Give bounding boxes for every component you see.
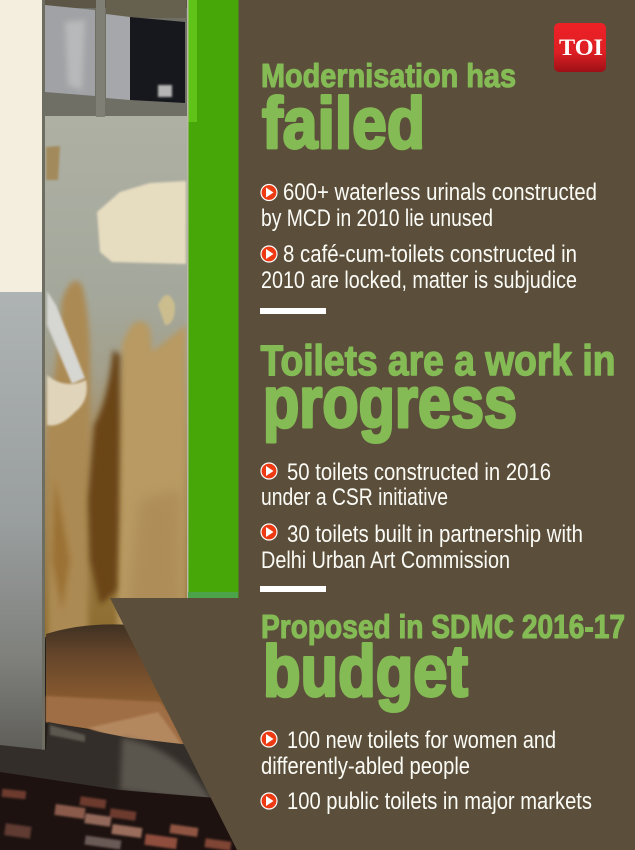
bullet: cafe-cum-toilets [261, 241, 577, 294]
bullet: art commission toilets: Delhi Urban Art Commission [261, 547, 510, 574]
heading: modernisation has failed: failed [262, 84, 425, 164]
logo: TOI [554, 23, 606, 72]
photo: dirty urinal in a public toilet [0, 0, 240, 850]
floor and step [0, 624, 240, 850]
section: modernisation has failed [261, 57, 597, 294]
section: proposed in budget [261, 608, 625, 815]
section: toilets are a work in progress [260, 337, 616, 574]
heading: proposed in SDMC budget [261, 608, 625, 712]
bullet: art commission toilets: 30 toilets built in partnership with [287, 521, 583, 548]
bullet: waterless urinals: by MCD in 2010 lie unused [261, 205, 493, 232]
bullet: art commission toilets [261, 521, 583, 574]
heading: proposed in SDMC budget: budget [263, 632, 468, 712]
window area [44, 0, 188, 117]
bullet: CSR toilets: under a CSR initiative [261, 484, 448, 511]
heading: modernisation has failed: Modernisation has [261, 57, 516, 94]
sunlit patch on wall [97, 181, 186, 264]
bullet: waterless urinals [261, 179, 597, 232]
bullet: new toilets for women: differently-abled people [261, 753, 470, 780]
bullet: CSR toilets [261, 459, 551, 511]
bullet: cafe-cum-toilets: 8 café-cum-toilets constructed in [283, 241, 577, 268]
bullet: CSR toilets: 50 toilets constructed in 2016 [287, 459, 551, 486]
left pillar [0, 0, 45, 750]
bullet: new toilets for women [261, 727, 556, 780]
heading: toilets are a work in progress: progress [263, 363, 517, 443]
white urinal [47, 291, 87, 425]
green door [187, 0, 239, 598]
bullet: new toilets for women: 100 new toilets for women and [287, 727, 556, 754]
heading: modernisation has failed [261, 57, 516, 164]
back wall with rust stains [44, 112, 188, 640]
logo: TOI: TOI [559, 35, 603, 60]
heading: toilets are a work in progress [260, 337, 616, 443]
brick floor [0, 772, 240, 850]
